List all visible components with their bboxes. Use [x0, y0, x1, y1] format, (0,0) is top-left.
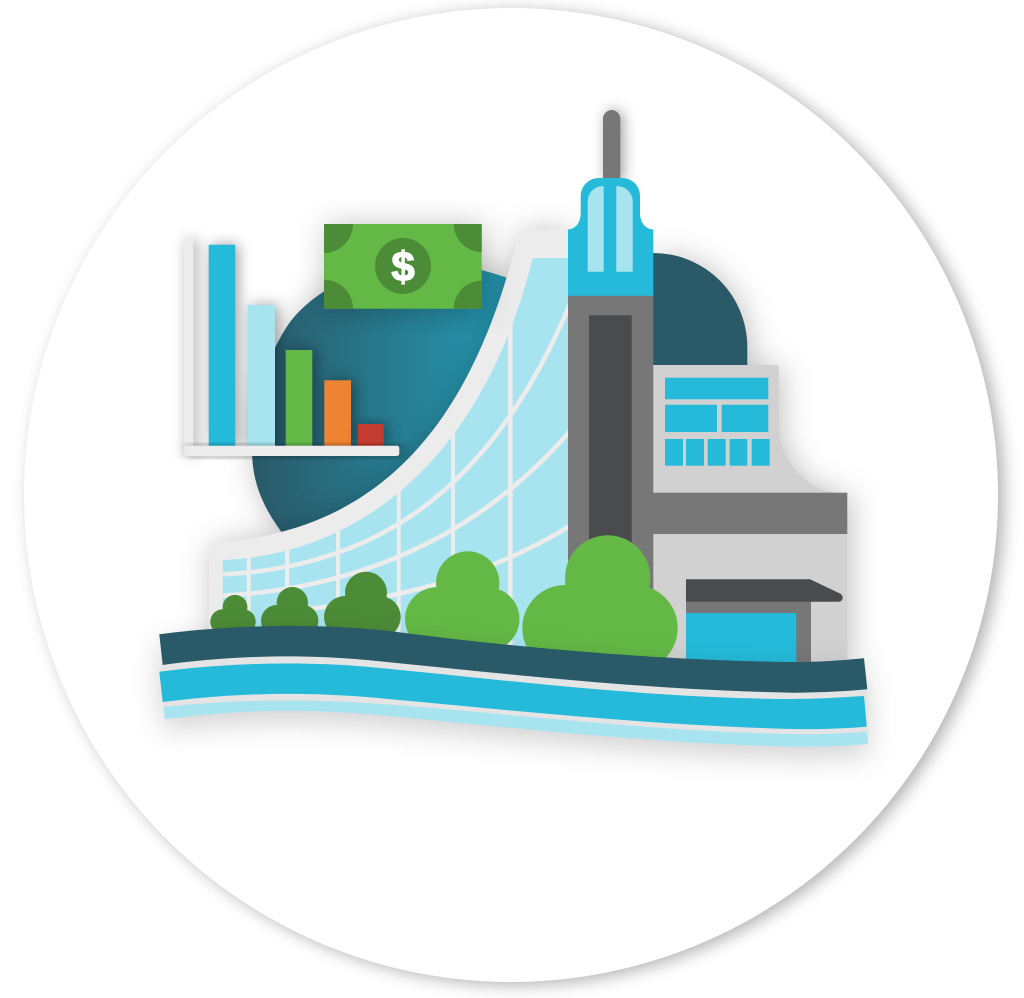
vertical glazing bars — [247, 320, 513, 660]
bill medallion — [375, 238, 431, 294]
storefront entrance — [686, 579, 843, 665]
crown right window — [616, 186, 633, 272]
bill body — [324, 224, 482, 309]
crown left window — [588, 186, 604, 272]
shelf — [184, 446, 399, 456]
shelf upright — [184, 239, 193, 454]
dark dome — [653, 253, 747, 365]
bill corner marks — [324, 224, 482, 309]
dollar sign: $ — [391, 243, 415, 290]
glass panes and mullions — [222, 258, 568, 647]
blue door — [686, 613, 796, 665]
curved glass building — [209, 229, 575, 670]
bar chart on shelf — [184, 239, 399, 456]
green bar — [286, 350, 312, 446]
row of trees — [210, 535, 678, 672]
tower body — [568, 295, 653, 665]
teal gradient orb behind chart — [252, 263, 510, 534]
dollar bill — [311, 210, 501, 324]
cyan water stripe — [159, 663, 867, 729]
antenna — [603, 110, 620, 182]
tower core — [589, 315, 632, 575]
upper office block — [653, 365, 840, 493]
lower building — [653, 534, 847, 664]
glass building frame — [209, 229, 568, 660]
pale separator — [162, 655, 868, 735]
tower crown — [568, 178, 653, 296]
large tree 4 — [405, 551, 520, 651]
small tree 2 — [261, 587, 318, 636]
wavy ground stripes — [159, 626, 868, 747]
dark road stripe — [159, 626, 867, 693]
office windows — [665, 378, 770, 466]
light blue bar — [248, 305, 275, 446]
horizontal glazing bars — [215, 304, 570, 611]
light water stripe — [163, 700, 868, 747]
right-hand buildings — [653, 253, 847, 664]
large tree 5 — [522, 535, 678, 672]
orange bar — [324, 380, 351, 446]
grey roof band — [653, 493, 847, 534]
cyan bar — [209, 245, 235, 447]
awning — [686, 579, 843, 602]
medium tree 3 — [324, 572, 401, 638]
entrance frame — [686, 601, 811, 665]
small tree 1 — [210, 595, 256, 635]
skyscraper tower — [568, 110, 653, 665]
red bar — [358, 424, 384, 446]
